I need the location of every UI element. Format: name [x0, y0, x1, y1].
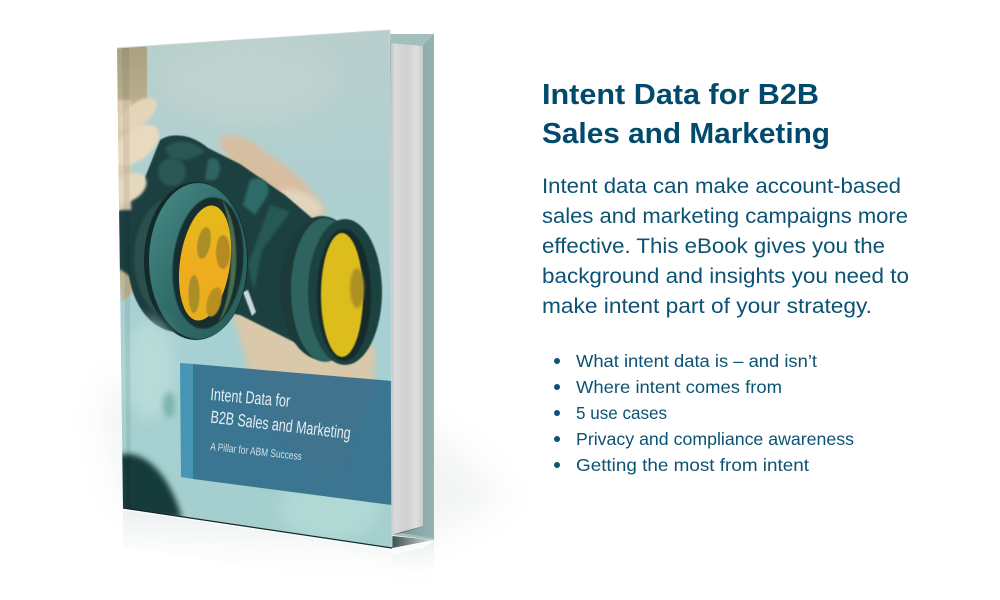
intro paragraph: sales and marketing campaigns more	[542, 204, 908, 228]
photo: right hand	[218, 135, 326, 225]
photo: glass streak	[243, 290, 256, 316]
cover edges	[123, 508, 392, 548]
ebook 3D mockup	[104, 25, 434, 555]
title band on cover	[180, 363, 392, 505]
heading: Sales and Marketing	[542, 118, 830, 150]
photo: binocular knob highlights	[165, 142, 205, 160]
intro paragraph: make intent part of your strategy.	[542, 294, 872, 318]
intro paragraph: Intent data can make account-based	[542, 174, 901, 198]
heading	[542, 79, 830, 150]
bullet list: 5 use cases	[576, 403, 667, 423]
title band on cover: B2B Sales and Marketing	[210, 407, 352, 443]
intro paragraph: effective. This eBook gives you the	[542, 234, 885, 258]
bullet list: Where intent comes from	[576, 377, 782, 397]
book cover photo	[104, 25, 400, 555]
cover subtitle: A Pillar for ABM Success	[210, 441, 303, 463]
bullet list: What intent data is – and isn’t	[576, 351, 817, 371]
photo: wrist beige under barrel	[120, 268, 134, 302]
heading: Intent Data for B2B	[542, 79, 819, 111]
bullet list: Getting the most from intent	[576, 455, 809, 475]
cover title: Intent Data for	[210, 384, 291, 411]
reflection of book	[123, 510, 434, 590]
page block	[391, 43, 423, 535]
intro paragraph: background and insights you need to	[542, 264, 909, 288]
photo: binocular bridge	[118, 135, 320, 345]
bullet list: Privacy and compliance awareness	[576, 429, 854, 449]
photo: beige wall strip	[117, 40, 147, 112]
photo: pale light patch	[173, 74, 326, 119]
photo: yellow lens with holes	[178, 206, 232, 320]
back cover	[390, 34, 434, 539]
photo: left hand fingers	[118, 97, 160, 212]
photo: right barrel	[281, 215, 338, 360]
book shadow	[100, 380, 510, 548]
photo: pale blur lower area	[286, 493, 374, 536]
photo: dark blur bottom left	[118, 454, 182, 518]
photo: body below binoculars	[232, 314, 378, 380]
photo: left barrel	[128, 273, 174, 332]
intro paragraph	[542, 174, 909, 318]
spine crease	[122, 48, 130, 455]
bullet list	[554, 351, 854, 475]
